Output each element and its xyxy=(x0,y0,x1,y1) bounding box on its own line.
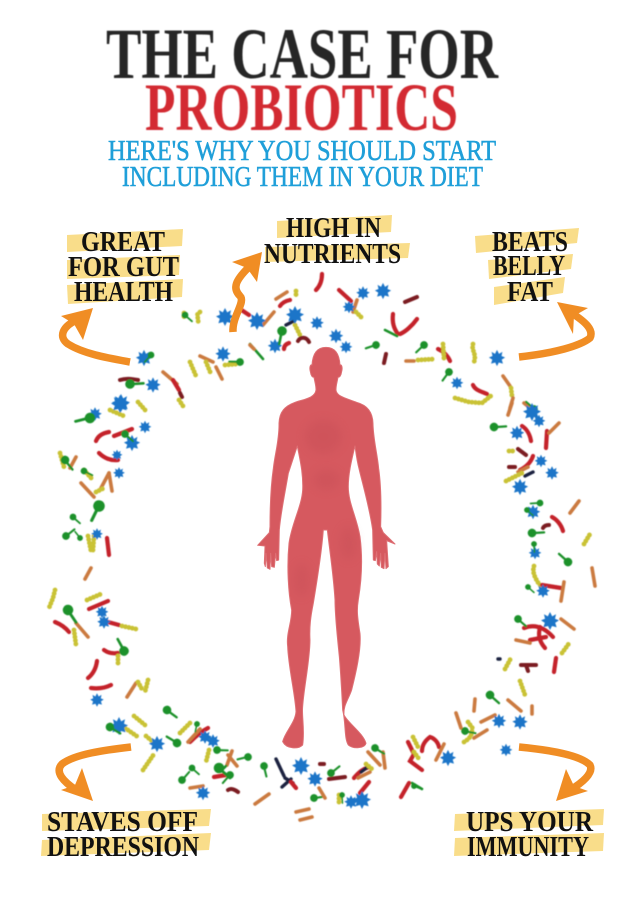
label: high in nutrients xyxy=(264,212,410,270)
label: beats belly fat: BEATS xyxy=(492,226,568,258)
microbes: right side xyxy=(486,403,595,703)
title line: probiotics: PROBIOTICS xyxy=(145,69,458,145)
arrow: to high in nutrients xyxy=(232,252,262,332)
arrow: to staves off depression xyxy=(59,747,131,801)
label: high in nutrients: NUTRIENTS xyxy=(264,238,401,270)
label: great for gut health: HEALTH xyxy=(74,276,173,308)
label: ups your immunity: IMMUNITY xyxy=(467,831,589,863)
subtitle: HERE'S WHY YOU SHOULD START xyxy=(108,135,496,167)
label: ups your immunity xyxy=(454,806,604,863)
microbes: top arc left xyxy=(112,274,324,412)
label: beats belly fat: BELLY xyxy=(493,250,565,282)
human body figure xyxy=(258,347,395,748)
label: great for gut health xyxy=(67,226,183,308)
label: high in nutrients: HIGH IN xyxy=(286,212,381,244)
arrow: to ups your immunity xyxy=(519,747,591,801)
title xyxy=(106,14,499,145)
microbes: left side xyxy=(49,395,151,707)
subtitle: INCLUDING THEM IN YOUR DIET xyxy=(122,161,483,193)
label: ups your immunity: UPS YOUR xyxy=(466,806,594,838)
arrow: to great for gut health xyxy=(61,308,130,362)
label: great for gut health: FOR GUT xyxy=(68,251,179,283)
arrow: to beats belly fat xyxy=(519,302,591,357)
microbes: bottom arc right xyxy=(319,699,532,809)
title line: the case for: THE CASE FOR xyxy=(106,14,499,94)
label: staves off depression: DEPRESSION xyxy=(47,831,199,863)
label: beats belly fat xyxy=(475,226,579,308)
label: beats belly fat: FAT xyxy=(507,276,553,308)
microbe ring xyxy=(49,274,595,820)
label: great for gut health: GREAT xyxy=(81,226,165,258)
label: staves off depression: STAVES OFF xyxy=(47,806,198,838)
subtitle xyxy=(108,135,496,193)
label: staves off depression xyxy=(41,806,211,863)
microbes: top arc right xyxy=(329,283,538,413)
microbes: bottom arc left xyxy=(105,705,325,820)
